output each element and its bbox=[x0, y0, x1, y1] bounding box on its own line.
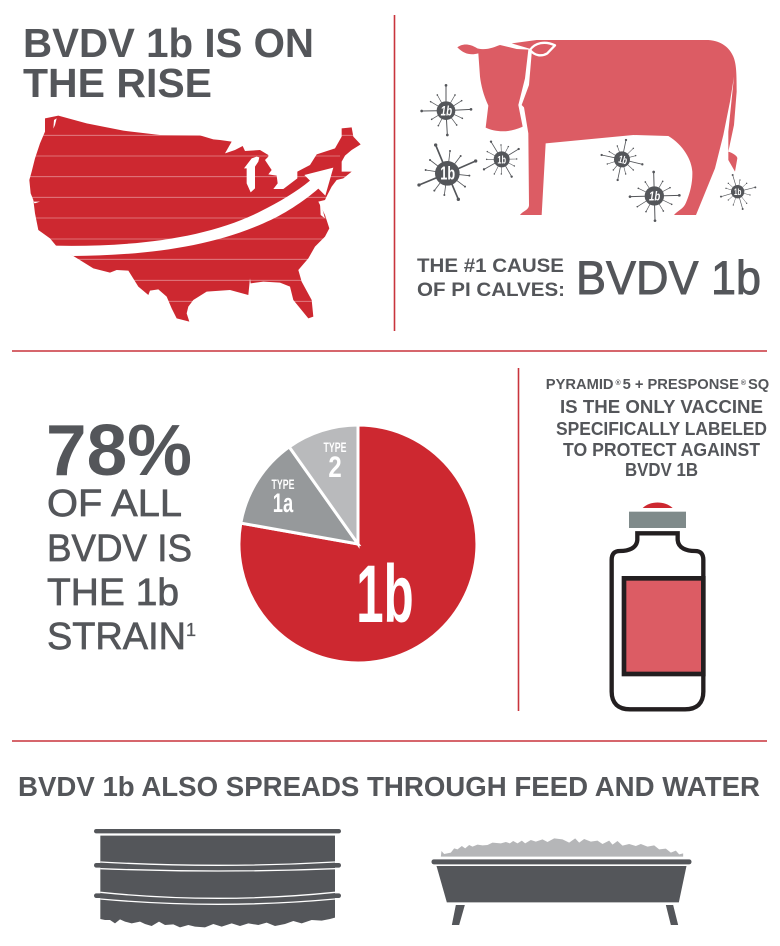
vaccine statement: 5 + PRESPONSE bbox=[623, 377, 739, 393]
feed and water heading: BVDV 1b ALSO SPREADS THROUGH FEED AND WATER bbox=[18, 771, 760, 802]
vaccine statement: TO PROTECT AGAINST bbox=[563, 440, 760, 460]
cow illustration bbox=[457, 40, 737, 215]
78 percent statistic: BVDV IS bbox=[47, 528, 192, 570]
78 percent statistic: THE 1b bbox=[47, 572, 179, 614]
virus 3: 1b bbox=[497, 154, 506, 166]
vaccine statement: ® bbox=[739, 379, 748, 387]
vaccine statement: ® bbox=[614, 379, 623, 387]
water tank icon bbox=[94, 829, 341, 927]
78 percent statistic: STRAIN bbox=[47, 616, 186, 658]
virus 6 bbox=[720, 174, 756, 210]
pie chart bbox=[239, 425, 477, 663]
vaccine statement: BVDV 1B bbox=[625, 460, 698, 480]
US map with rising arrow bbox=[28, 116, 361, 322]
virus 3 bbox=[483, 140, 520, 178]
vaccine statement: SPECIFICALLY LABELED bbox=[556, 419, 767, 439]
virus 4: 1b bbox=[617, 153, 629, 167]
virus 4 bbox=[600, 139, 643, 181]
vaccine statement: SQ bbox=[748, 377, 769, 393]
78 percent statistic bbox=[46, 411, 196, 658]
vaccine statement: IS THE ONLY VACCINE bbox=[560, 397, 763, 417]
pie chart: TYPE bbox=[324, 441, 347, 456]
PI calves caption: BVDV 1b bbox=[576, 251, 761, 304]
virus 2: 1b bbox=[440, 164, 455, 184]
PI calves caption: OF PI CALVES: bbox=[417, 279, 565, 301]
pie chart: 1a bbox=[273, 487, 293, 518]
title: BVDV 1b IS ON bbox=[23, 20, 314, 66]
pie chart: TYPE bbox=[272, 478, 295, 493]
virus 1 bbox=[420, 84, 472, 136]
title bbox=[23, 20, 314, 106]
PI calves caption bbox=[417, 251, 761, 304]
vaccine statement bbox=[546, 377, 769, 480]
pie chart: 2 bbox=[328, 449, 342, 484]
feed trough icon bbox=[431, 838, 691, 925]
virus 5: 1b bbox=[649, 189, 660, 204]
virus 1: 1b bbox=[441, 103, 452, 119]
virus particles bbox=[417, 84, 756, 222]
virus 2 bbox=[417, 143, 477, 201]
pie chart: 1b bbox=[356, 549, 414, 640]
78 percent statistic: 78% bbox=[46, 411, 192, 491]
78 percent statistic: 1 bbox=[186, 620, 196, 640]
vaccine statement: PYRAMID bbox=[546, 377, 614, 393]
virus 6: 1b bbox=[734, 187, 742, 197]
vaccine vial bbox=[612, 502, 703, 709]
78 percent statistic: OF ALL bbox=[47, 483, 182, 525]
title: THE RISE bbox=[23, 60, 212, 106]
PI calves caption: THE #1 CAUSE bbox=[417, 255, 564, 277]
virus 5 bbox=[629, 171, 681, 222]
